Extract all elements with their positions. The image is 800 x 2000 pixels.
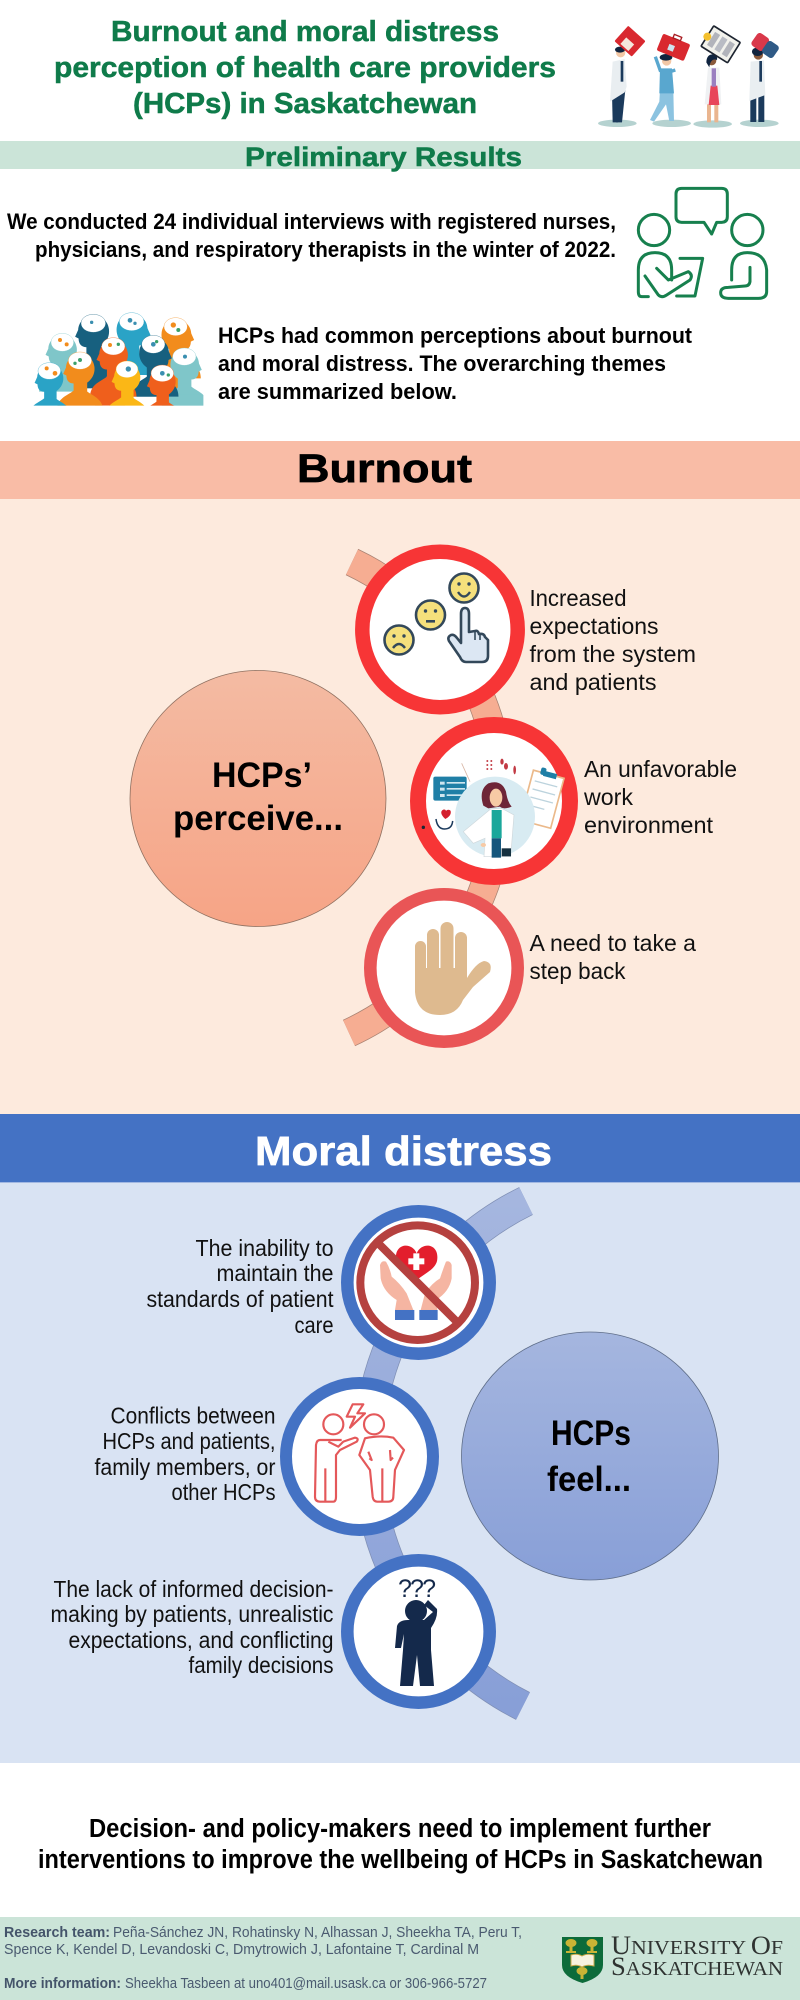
text: unfavorable work environment: An unfavorable	[584, 756, 737, 782]
text: conflicts	[94, 1402, 276, 1505]
text: conflicts: HCPs and patients,	[102, 1428, 276, 1454]
text block: call to action: interventions to improve the wellbeing of HCPs in Saskatchewan	[38, 1846, 763, 1874]
heading band: Preliminary Results: Preliminary Results	[245, 142, 522, 172]
icon: two people in conflict	[286, 1383, 433, 1530]
text block: call to action: Decision- and policy-makers need to implement further	[89, 1815, 711, 1843]
circle: HCPs' perceive: perceive...	[173, 799, 343, 838]
heading band: Preliminary Results	[0, 141, 800, 172]
text: lack of informed decision-making: The lack of informed decision-	[54, 1576, 334, 1602]
text: inability to maintain standards: standards of patient	[146, 1286, 334, 1312]
panel: footer	[0, 1917, 800, 2000]
text: unfavorable work environment: environment	[584, 812, 714, 838]
text: step back: step back	[530, 958, 626, 984]
text block: common perceptions: and moral distress. The overarching themes	[218, 351, 666, 376]
icon: confused person	[347, 1560, 490, 1703]
text: inability to maintain standards: care	[294, 1312, 334, 1338]
text: research team: Research team:	[4, 1925, 110, 1941]
icon: doctor in work environment	[418, 725, 570, 877]
text: increased expectations: Increased	[530, 585, 626, 611]
text: lack of informed decision-making: making by patients, unrealistic	[50, 1601, 334, 1627]
icon: stop hand	[370, 894, 518, 1042]
arc connector: burnout	[349, 562, 500, 1033]
circle: HCPs' perceive: HCPs’	[212, 756, 312, 795]
text: research team	[4, 1925, 522, 1958]
text: inability to maintain standards	[146, 1235, 334, 1338]
text: conflicts: other HCPs	[172, 1479, 276, 1505]
text block: common perceptions: are summarized below.	[218, 379, 457, 404]
title: Burnout and moral distress	[111, 16, 499, 48]
text: conflicts: Conflicts between	[110, 1402, 276, 1428]
arc connector: moral distress	[368, 1201, 526, 1706]
text: more information: More information:	[4, 1976, 121, 1992]
panel: moral distress	[0, 1114, 800, 1763]
text: lack of informed decision-making: expectations, and conflicting	[68, 1627, 334, 1653]
text: conflicts: family members, or	[94, 1454, 276, 1480]
icon: two people talking	[638, 188, 767, 298]
title	[54, 16, 556, 120]
icon: crowd of heads with brains	[33, 312, 204, 406]
text: unfavorable work environment: work	[583, 784, 634, 810]
logo: University of Saskatchewan: UNIVERSITY OF	[611, 1931, 783, 1960]
panel: burnout	[0, 441, 800, 1114]
circle: HCPs feel	[462, 1332, 718, 1580]
text: inability to maintain standards: The inability to	[196, 1235, 334, 1261]
heading: Moral distress: Moral distress	[255, 1128, 552, 1174]
text block: interviews: physicians, and respiratory therapists in the winter of 2022.	[35, 237, 616, 262]
text: increased expectations	[530, 585, 696, 695]
text: lack of informed decision-making: family decisions	[188, 1652, 334, 1678]
text: increased expectations: from the system	[530, 641, 696, 667]
text block: common perceptions	[218, 323, 693, 404]
text: more information: Sheekha Tasbeen at uno401@mail.usask.ca or 306-966-5727	[125, 1976, 487, 1992]
text: inability to maintain standards: maintain the	[216, 1260, 334, 1286]
text: research team: Spence K, Kendel D, Levandoski C, Dmytrowich J, Lafontaine T, Cardinal M	[4, 1942, 479, 1958]
text: research team: Peña-Sánchez JN, Rohatinsky N, Alhassan J, Sheekha TA, Peru T,	[113, 1925, 522, 1941]
icon: rating faces and pointer	[362, 552, 518, 707]
text: step back: A need to take a	[530, 930, 696, 956]
text block: interviews	[7, 209, 616, 262]
circle: HCPs feel: feel...	[547, 1460, 631, 1499]
logo: University of Saskatchewan	[562, 1931, 783, 1983]
icon: care not possible	[347, 1211, 490, 1354]
heading: Burnout: Burnout	[297, 447, 472, 491]
text: increased expectations: and patients	[530, 669, 656, 695]
text: unfavorable work environment	[583, 756, 737, 838]
circle: HCPs feel: HCPs	[551, 1414, 631, 1453]
text block: call to action	[38, 1815, 763, 1874]
text: increased expectations: expectations	[530, 613, 658, 639]
text block: interviews: We conducted 24 individual interviews with registered nurses,	[7, 209, 616, 234]
title: perception of health care providers	[54, 52, 556, 84]
text: more information	[4, 1976, 487, 1992]
circle: HCPs' perceive	[130, 670, 386, 926]
logo: University of Saskatchewan: SASKATCHEWAN	[611, 1952, 783, 1981]
icon: four health care providers carrying loads	[598, 26, 780, 128]
title: (HCPs) in Saskatchewan	[133, 88, 477, 120]
text: lack of informed decision-making	[50, 1576, 334, 1678]
text block: common perceptions: HCPs had common perceptions about burnout	[218, 323, 693, 348]
text: step back	[530, 930, 696, 984]
icon: confused person: ???	[398, 1575, 436, 1603]
